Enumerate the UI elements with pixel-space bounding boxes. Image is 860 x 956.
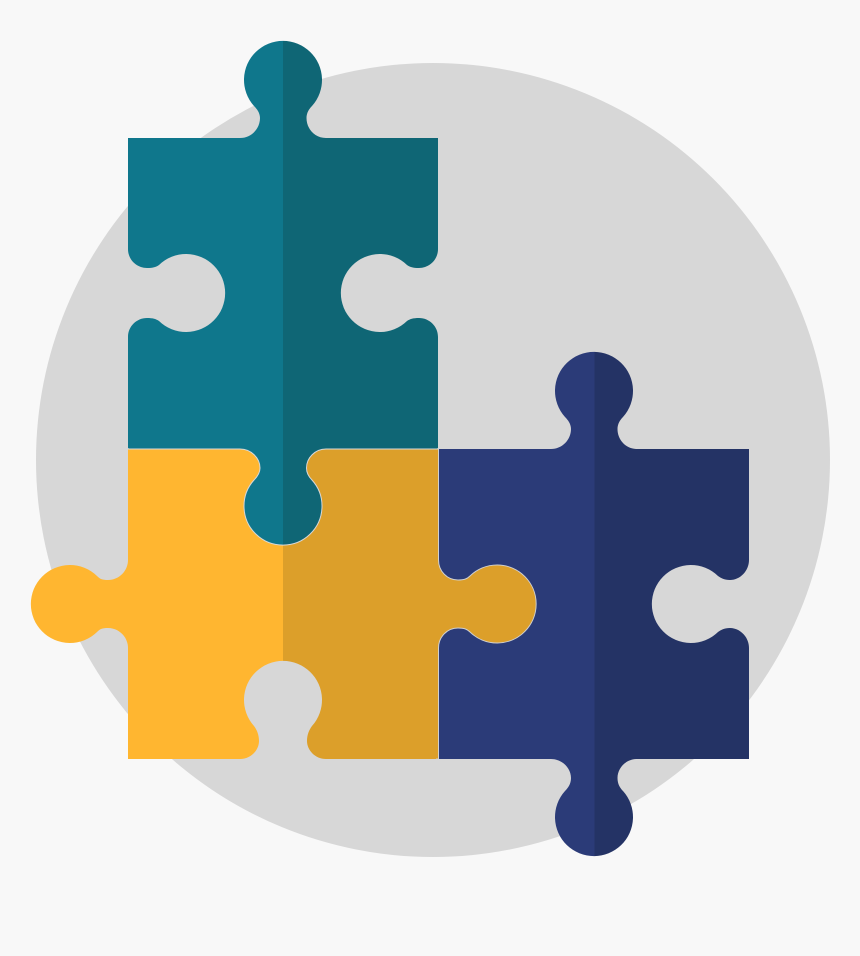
- background circle: [36, 63, 830, 857]
- teal puzzle piece: [128, 41, 438, 545]
- navy puzzle piece: [439, 352, 749, 856]
- puzzle infographic: [30, 40, 830, 857]
- yellow puzzle piece: [31, 449, 536, 759]
